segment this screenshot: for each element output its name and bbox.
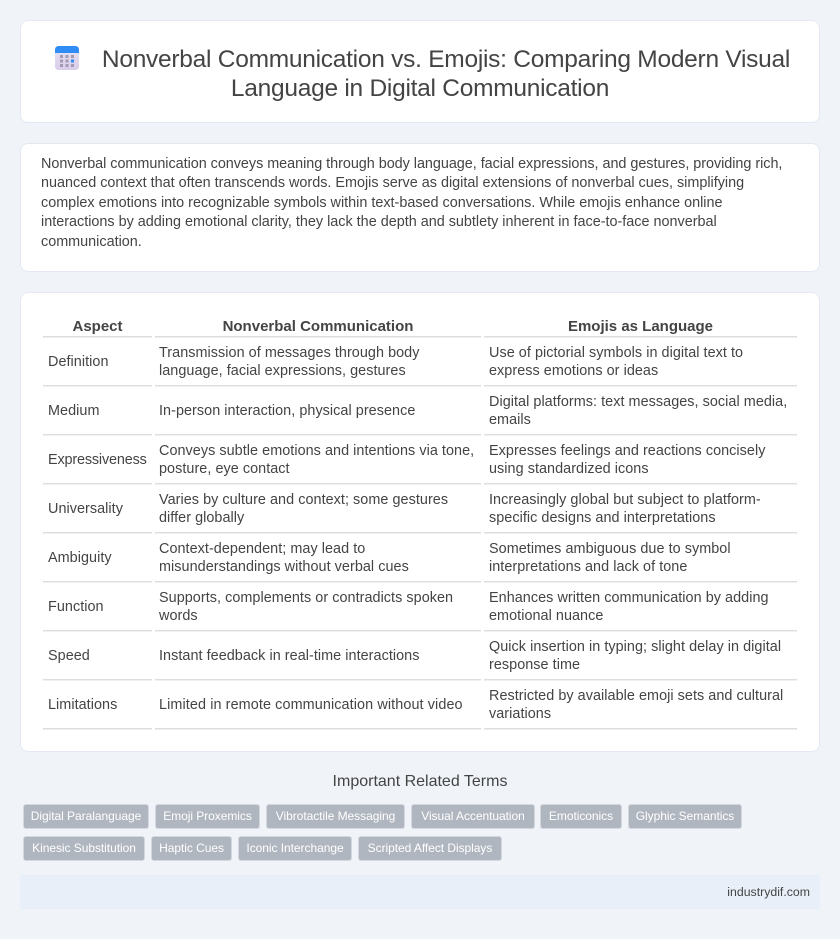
footer bbox=[20, 875, 820, 909]
table header: Emojis as Language bbox=[568, 318, 713, 335]
row: Function: emotional nuance bbox=[489, 608, 603, 624]
row: Universality: Varies by culture and context; some gestures bbox=[159, 492, 448, 508]
row: Expressiveness: posture, eye contact bbox=[159, 461, 290, 477]
row: Ambiguity: misunderstandings without verbal cues bbox=[159, 559, 409, 575]
tags: related terms: Scripted Affect Displays bbox=[368, 841, 492, 855]
row: Speed: Quick insertion in typing; slight delay in digital bbox=[489, 639, 781, 655]
table header: Nonverbal Communication bbox=[223, 318, 413, 335]
tags: related terms: Emoticonics bbox=[549, 809, 613, 823]
panel: header bbox=[20, 20, 820, 123]
text block: intro paragraph: nuanced context that often transcends words. Emojis serve as digital extensions of nonverbal cues, simplifying bbox=[41, 175, 744, 191]
row: Expressiveness: Expressiveness bbox=[48, 452, 147, 468]
row: Ambiguity: Sometimes ambiguous due to symbol bbox=[489, 541, 731, 557]
row: Definition: Use of pictorial symbols in digital text to bbox=[489, 345, 743, 361]
row: Expressiveness: Expresses feelings and reactions concisely bbox=[489, 443, 765, 459]
row: Expressiveness: Conveys subtle emotions and intentions via tone, bbox=[159, 443, 474, 459]
row: Ambiguity: Context-dependent; may lead to bbox=[159, 541, 365, 557]
row: Function bbox=[48, 590, 769, 624]
row: Definition: Transmission of messages through body bbox=[159, 345, 419, 361]
row: Expressiveness: using standardized icons bbox=[489, 461, 649, 477]
row: Limitations: Limitations bbox=[48, 697, 117, 713]
row: Limitations: Limited in remote communication without video bbox=[159, 697, 463, 713]
row: Universality bbox=[48, 492, 761, 526]
title: Language in Digital Communication bbox=[231, 75, 609, 102]
row: Limitations bbox=[48, 688, 783, 722]
icon: calendar bbox=[55, 46, 79, 70]
table header: Aspect bbox=[72, 318, 123, 335]
text block: intro paragraph: complex emotions into recognizable symbols within text-based conversations. While emojis enhance online bbox=[41, 195, 723, 211]
tags: related terms: Vibrotactile Messaging bbox=[276, 809, 395, 823]
row: Limitations: Restricted by available emoji sets and cultural bbox=[489, 688, 783, 704]
tags: related terms: Emoji Proxemics bbox=[163, 809, 252, 823]
row: Definition bbox=[48, 345, 743, 379]
panel: comparison table bbox=[20, 292, 820, 752]
row: Universality: Increasingly global but subject to platform- bbox=[489, 492, 761, 508]
row: Definition: language, facial expressions, gestures bbox=[159, 363, 406, 379]
row: Universality: specific designs and interpretations bbox=[489, 510, 716, 526]
row: Speed: response time bbox=[489, 657, 580, 673]
text block: intro paragraph: communication. bbox=[41, 234, 142, 250]
tags: related terms: Kinesic Substitution bbox=[32, 841, 136, 855]
row: Limitations: variations bbox=[489, 706, 551, 722]
row: Speed bbox=[48, 639, 781, 673]
row: Speed: Speed bbox=[48, 648, 90, 664]
row: Ambiguity: interpretations and lack of tone bbox=[489, 559, 687, 575]
text block: intro paragraph: interactions by adding emotional clarity, they lack the depth and subtlety inherent in face-to-face nonverbal bbox=[41, 214, 717, 230]
title: Nonverbal Communication vs. Emojis: Comparing Modern Visual bbox=[102, 46, 790, 73]
title bbox=[102, 46, 790, 102]
row: Ambiguity: Ambiguity bbox=[48, 550, 112, 566]
row: Universality: Universality bbox=[48, 501, 123, 517]
footer: industrydif.com bbox=[727, 885, 810, 899]
row: Definition: express emotions or ideas bbox=[489, 363, 658, 379]
text block: intro paragraph bbox=[41, 156, 782, 250]
tags: related terms: Digital Paralanguage bbox=[31, 809, 141, 823]
row: Medium bbox=[48, 394, 787, 428]
row: Medium: Digital platforms: text messages, social media, bbox=[489, 394, 787, 410]
row: Medium: emails bbox=[489, 412, 531, 428]
row: Speed: Instant feedback in real-time interactions bbox=[159, 648, 419, 664]
heading: related terms: Important Related Terms bbox=[333, 773, 507, 790]
tags: related terms: Visual Accentuation bbox=[421, 809, 525, 823]
tags: related terms bbox=[23, 804, 742, 861]
table header bbox=[72, 318, 713, 335]
row: Function: words bbox=[159, 608, 198, 624]
row: Function: Function bbox=[48, 599, 104, 615]
tags: related terms: Haptic Cues bbox=[159, 841, 224, 855]
row: Expressiveness bbox=[48, 443, 766, 477]
row: Function: Supports, complements or contradicts spoken bbox=[159, 590, 453, 606]
row: Function: Enhances written communication by adding bbox=[489, 590, 769, 606]
row: Definition: Definition bbox=[48, 354, 108, 370]
row: Universality: differ globally bbox=[159, 510, 244, 526]
row: Medium: In-person interaction, physical presence bbox=[159, 403, 415, 419]
tags: related terms: Iconic Interchange bbox=[246, 841, 344, 855]
text block: intro paragraph: Nonverbal communication conveys meaning through body language, facial expressions, and gestures, providing rich, bbox=[41, 156, 782, 172]
row: Medium: Medium bbox=[48, 403, 99, 419]
row: Ambiguity bbox=[48, 541, 731, 575]
panel: intro bbox=[20, 143, 820, 272]
tags: related terms: Glyphic Semantics bbox=[636, 809, 734, 823]
